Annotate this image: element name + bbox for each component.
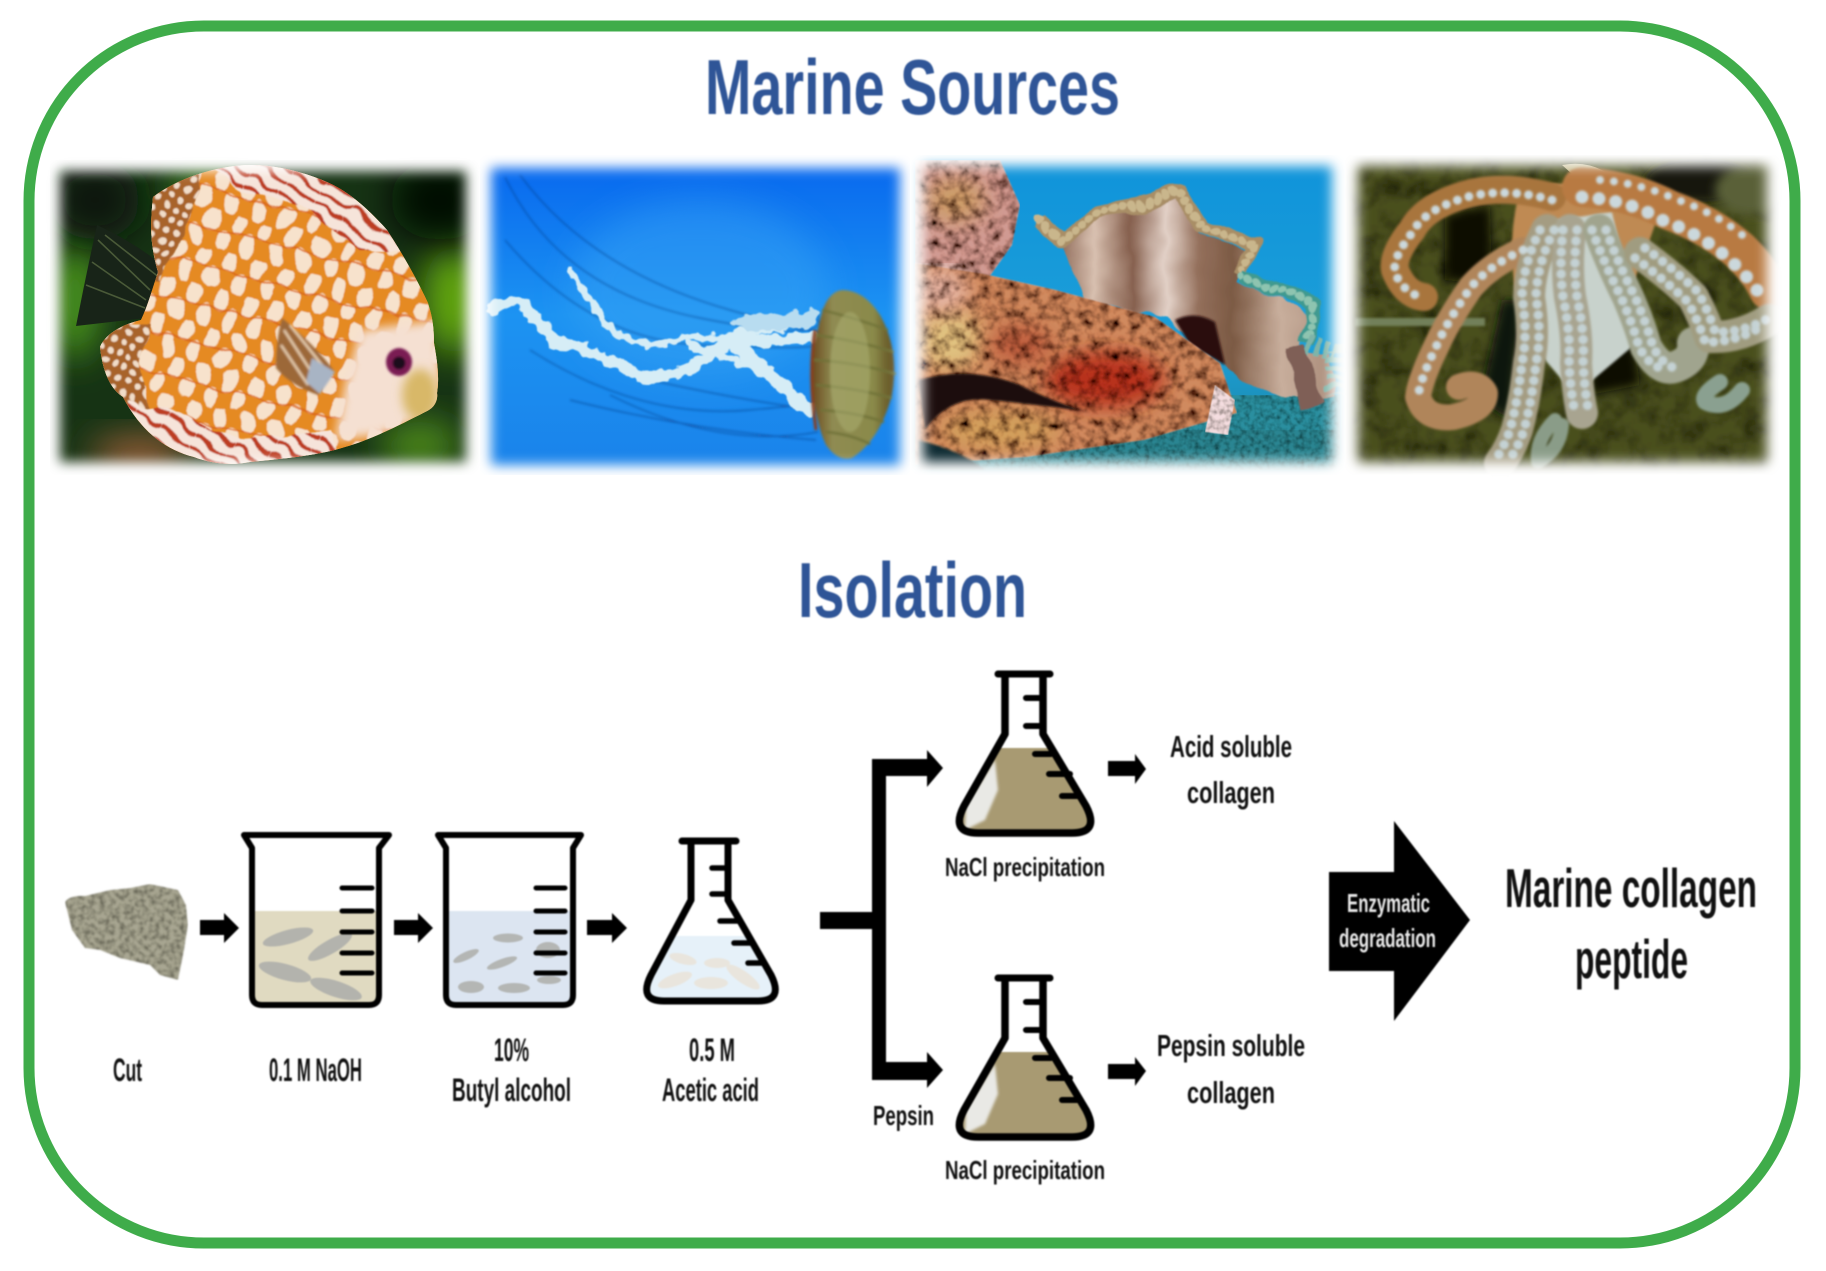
arrow: enzymatic degradation	[1329, 821, 1470, 1021]
octopus mantle	[1562, 164, 1602, 172]
heading: Marine Sources: Marine Sources	[705, 43, 1120, 131]
label: Acid soluble collagen: collagen	[1187, 775, 1275, 810]
arrow: alcohol to acetic acid	[587, 913, 627, 943]
label: 0.5 M Acetic acid: Acetic acid	[662, 1072, 759, 1108]
label: Cut: Cut	[113, 1052, 142, 1088]
label: 0.1 M NaOH: 0.1 M NaOH	[269, 1052, 362, 1088]
label: 0.5 M Acetic acid	[662, 1032, 759, 1108]
label: Marine collagen peptide	[1505, 857, 1757, 990]
process: isolation workflow	[65, 674, 1757, 1185]
octopus suckers	[1395, 180, 1774, 463]
label: NaCl precipitation upper: NaCl precipitation	[945, 852, 1105, 882]
label: Pepsin soluble collagen: collagen	[1187, 1075, 1275, 1110]
coral pale tips	[1205, 385, 1235, 435]
arrow: to pepsin soluble collagen	[1108, 1057, 1146, 1086]
label: Pepsin soluble collagen: Pepsin soluble	[1157, 1028, 1305, 1063]
label: 10% Butyl alcohol	[452, 1032, 571, 1108]
icon: flask pepsin soluble	[950, 978, 1100, 1142]
coral dark shadow	[918, 374, 1090, 430]
jellyfish thin tentacles	[505, 175, 831, 440]
arrow: branching connector	[820, 750, 943, 1088]
fish pectoral fin	[276, 318, 335, 395]
photo: discus fish	[49, 160, 490, 475]
photo: octopus	[1345, 155, 1785, 475]
coral soft leather fan	[1040, 190, 1336, 412]
jellyfish pale oral arms	[492, 270, 816, 410]
photo: jellyfish	[480, 155, 910, 475]
coral main reef	[912, 263, 1237, 465]
photo: coral reef	[910, 155, 1345, 475]
fish tail fin	[76, 226, 158, 326]
arrow: NaOH to alcohol	[394, 913, 433, 943]
icon: beaker NaOH	[244, 835, 389, 1005]
arrow: cut to NaOH	[200, 913, 239, 943]
arrow: enzymatic degradation: Enzymatic	[1347, 888, 1430, 918]
octopus arms	[1395, 187, 1769, 463]
octopus dark gaps	[1445, 205, 1492, 285]
heading: Isolation: Isolation	[798, 546, 1027, 634]
label: Pepsin: Pepsin	[873, 1100, 934, 1131]
jellyfish bell	[812, 290, 896, 459]
label: 10% Butyl alcohol: 10%	[494, 1032, 529, 1068]
label: Pepsin soluble collagen	[1157, 1028, 1305, 1110]
label: NaCl precipitation lower: NaCl precipitation	[945, 1155, 1105, 1185]
icon: flask acetic acid	[640, 841, 780, 1006]
icon: flask acid soluble	[950, 674, 1100, 838]
label: 0.5 M Acetic acid: 0.5 M	[689, 1032, 735, 1068]
arrow: enzymatic degradation: degradation	[1339, 923, 1436, 953]
fish eye	[386, 348, 412, 376]
label: Acid soluble collagen: Acid soluble	[1170, 729, 1292, 764]
label: Acid soluble collagen	[1170, 729, 1292, 810]
arrow: to acid soluble collagen	[1108, 754, 1146, 784]
icon: cut marine tissue piece	[65, 884, 188, 980]
label: Marine collagen peptide: peptide	[1575, 928, 1688, 990]
fish body	[90, 160, 450, 470]
label: 10% Butyl alcohol: Butyl alcohol	[452, 1072, 571, 1108]
coral left column	[915, 160, 1020, 276]
icon: beaker butyl alcohol	[438, 835, 581, 1005]
